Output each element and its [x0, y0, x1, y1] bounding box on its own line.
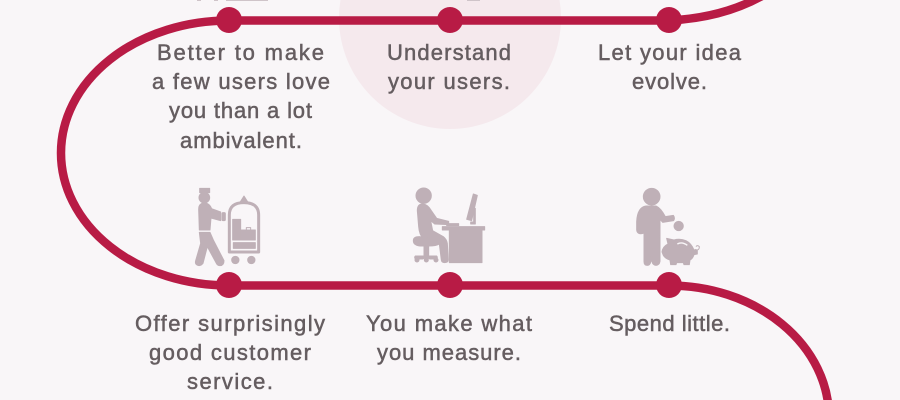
text: better to make a few users love: a few users love — [152, 69, 330, 94]
icon: person dropping coin in piggy bank — [637, 188, 699, 265]
text: better to make a few users love — [152, 40, 330, 153]
text: you make what you measure: You make what — [366, 311, 532, 336]
icon: bellhop with luggage cart — [195, 188, 259, 266]
text: offer surprisingly good customer service: service. — [187, 369, 273, 394]
timeline nodes — [216, 7, 682, 298]
cropped icon remnants at top edge — [197, 0, 480, 1]
text: understand your users: Understand — [387, 40, 511, 65]
text: you make what you measure: you measure. — [377, 340, 521, 365]
text: better to make a few users love: Better to make — [157, 40, 324, 65]
text: understand your users: your users. — [388, 69, 510, 94]
icon: person working at desk — [413, 188, 485, 263]
text: better to make a few users love: you than a lot — [169, 98, 312, 123]
highlight circle behind centre step — [339, 0, 561, 129]
text: understand your users — [387, 40, 511, 94]
text: let your idea evolve: Let your idea — [598, 40, 742, 65]
text: offer surprisingly good customer service — [135, 311, 325, 394]
text: offer surprisingly good customer service: good customer — [149, 340, 311, 365]
text: let your idea evolve — [598, 40, 742, 94]
text: better to make a few users love: ambivalent. — [180, 128, 302, 153]
text: let your idea evolve: evolve. — [632, 69, 707, 94]
text: spend little: Spend little. — [609, 311, 730, 336]
text: you make what you measure — [366, 311, 532, 365]
text: offer surprisingly good customer service: Offer surprisingly — [135, 311, 325, 336]
